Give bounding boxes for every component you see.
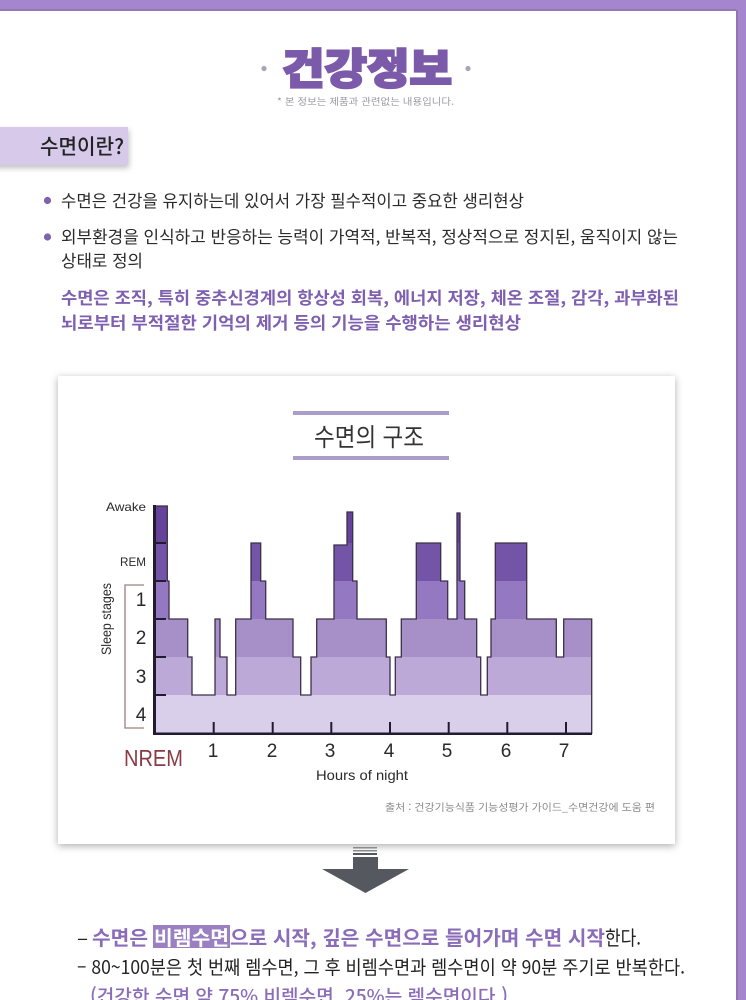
purple emphasis text bbox=[61, 284, 679, 334]
axes and ticks bbox=[153, 505, 592, 735]
chart title: 수면의 구조 bbox=[314, 418, 424, 454]
x axis labels: 4 bbox=[384, 741, 395, 762]
x axis labels: 5 bbox=[442, 741, 452, 762]
y axis labels: REM bbox=[120, 555, 146, 569]
summary line 2: – 80~100분은 첫 번째 렘수면, 그 후 비렘수면과 렘수면이 약 90분 주기로 반복한다. bbox=[77, 953, 685, 980]
panel: sleep structure card bbox=[58, 376, 675, 844]
bullet text block: 외부환경을 인식하고 반응하는 능력이 가역적, 반복적, 정상적으로 정지된, 움직이지 않는 bbox=[61, 223, 678, 248]
x axis labels: 2 bbox=[267, 741, 277, 762]
bullet text block: 수면은 건강을 유지하는데 있어서 가장 필수적이고 중요한 생리현상 bbox=[61, 187, 524, 212]
x axis labels: 3 bbox=[325, 741, 335, 762]
NREM label: NREM bbox=[124, 745, 183, 771]
y axis labels: Awake bbox=[106, 500, 146, 514]
y axis labels: 2 bbox=[136, 628, 146, 649]
summary line 1: 으로 시작, 깊은 수면으로 들어가며 수면 시작 bbox=[230, 922, 605, 951]
x axis labels: 1 bbox=[208, 741, 218, 762]
summary line 1: 한다. bbox=[605, 922, 641, 951]
x axis labels: 6 bbox=[501, 741, 511, 762]
y axis labels: 4 bbox=[136, 705, 147, 726]
y axis labels: 1 bbox=[136, 590, 146, 611]
subtitle note: * 본 정보는 제품과 관련없는 내용입니다. bbox=[277, 94, 454, 108]
summary line 1: 비렘수면 bbox=[154, 922, 229, 951]
x axis labels bbox=[208, 741, 569, 762]
y axis labels: 3 bbox=[136, 667, 146, 688]
summary line 1: 수면은 bbox=[92, 922, 148, 951]
purple emphasis text: 뇌로부터 부적절한 기억의 제거 등의 기능을 수행하는 생리현상 bbox=[61, 309, 521, 334]
summary line 1 bbox=[77, 922, 641, 951]
section heading badge: 수면이란? bbox=[40, 131, 124, 161]
bullet text block: 상태로 정의 bbox=[61, 247, 143, 272]
icon: down arrow bbox=[322, 847, 409, 893]
y axis labels: Sleep stages bbox=[98, 583, 114, 655]
sleep stage hypnogram chart bbox=[98, 500, 593, 783]
bullet text block bbox=[44, 187, 678, 272]
NREM bracket bbox=[125, 585, 144, 728]
x axis title: Hours of night bbox=[316, 767, 408, 783]
source note: 출처 : 건강기능식품 기능성평가 가이드_수면건강에 도움 편 bbox=[385, 799, 655, 814]
stage colour bands bbox=[153, 505, 593, 735]
y axis labels bbox=[98, 500, 147, 726]
summary line 1: – bbox=[77, 922, 88, 951]
page title: 건강정보 bbox=[282, 36, 452, 97]
purple emphasis text: 수면은 조직, 특히 중추신경계의 항상성 회복, 에너지 저장, 체온 조절, 감각, 과부화된 bbox=[61, 284, 679, 309]
section heading badge bbox=[0, 127, 128, 165]
step outline bbox=[154, 506, 592, 734]
chart title bbox=[293, 411, 449, 460]
x axis labels: 7 bbox=[559, 741, 569, 762]
